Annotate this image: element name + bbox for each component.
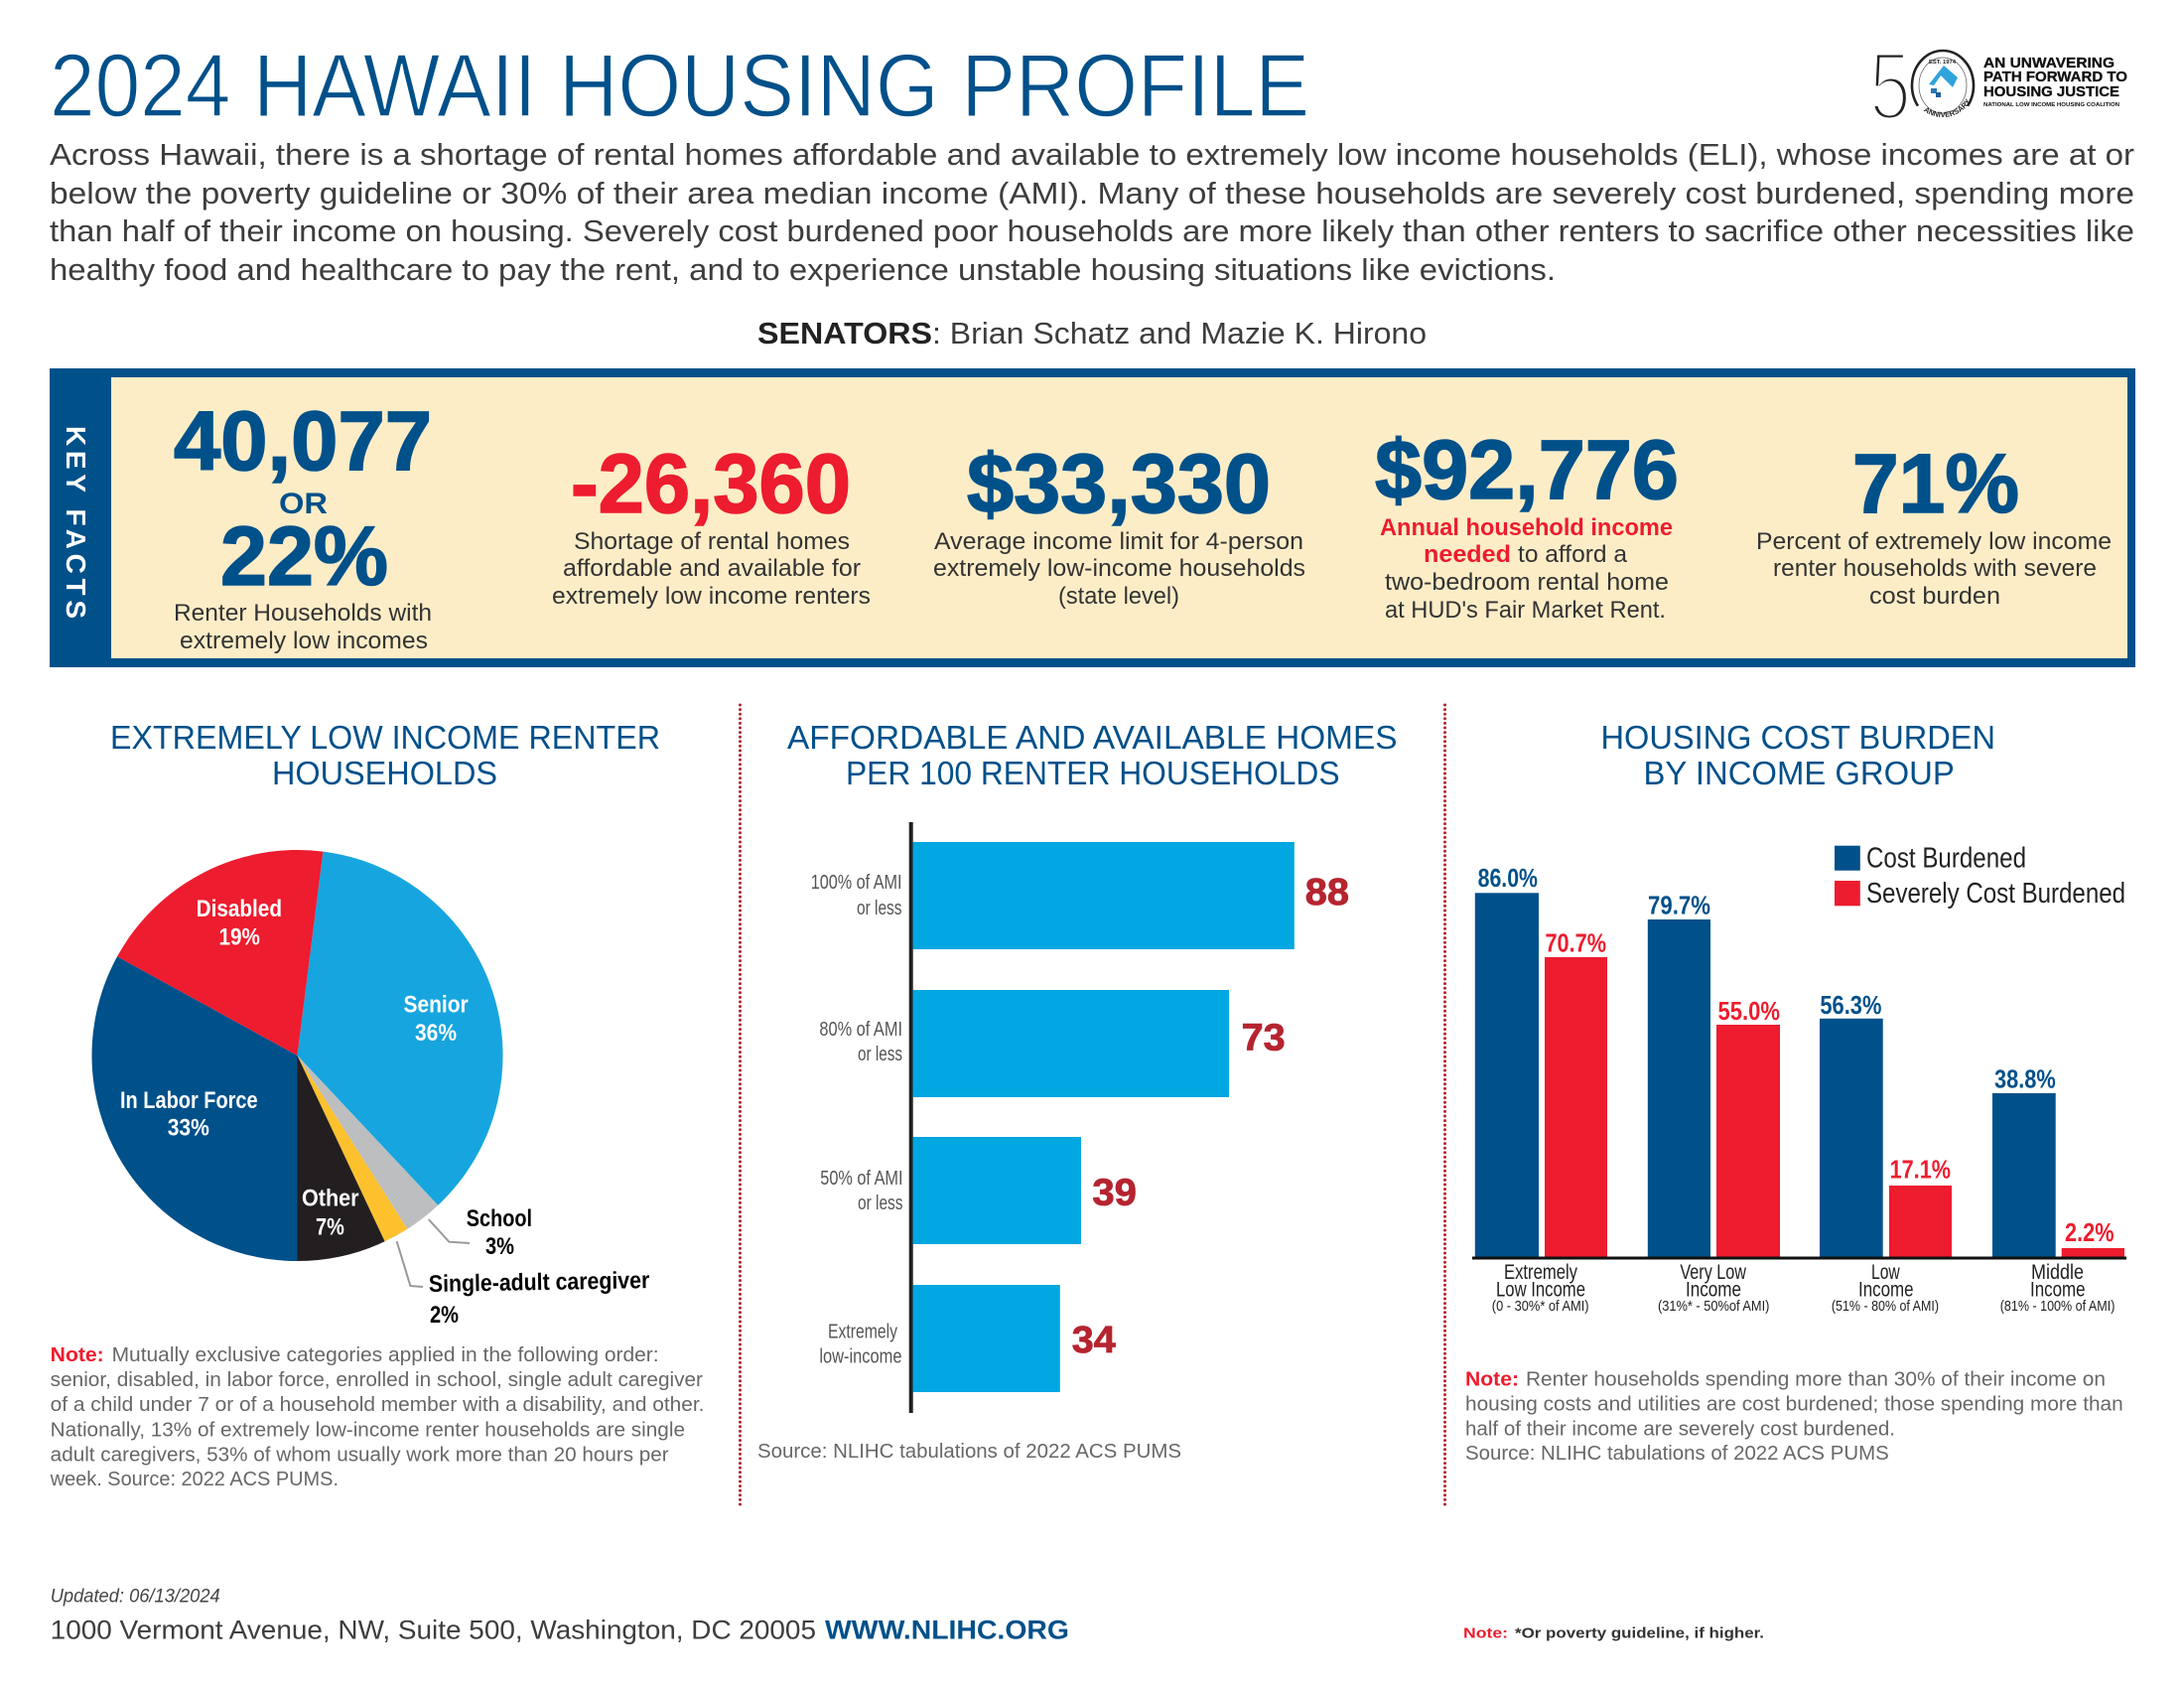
heading: grouped bar chart: HOUSING COST BURDEN xyxy=(1600,719,1995,756)
bar chart: or less xyxy=(858,1193,903,1214)
legend: Severely Cost Burdened xyxy=(1866,878,2125,910)
pie chart: Other xyxy=(302,1186,359,1212)
heading: grouped bar chart: BY INCOME GROUP xyxy=(1644,755,1955,791)
fact: annual household income needed: two-bedroom rental home xyxy=(1385,569,1669,596)
fact: renter households with extremely low incomes: 40,077 xyxy=(174,394,432,488)
intro paragraph: Across Hawaii, there is a shortage of rental homes affordable and available to extremely low income households (ELI), whose incomes are at or xyxy=(50,137,2134,172)
bar chart: low-income xyxy=(819,1346,901,1368)
fact: renter households with extremely low incomes: OR xyxy=(279,488,328,520)
panel: key facts xyxy=(50,368,2135,667)
senators: SENATORS xyxy=(757,316,932,351)
grouped bar chart: 70.7% xyxy=(1545,927,1606,957)
fact: renter households with extremely low incomes: 22% xyxy=(220,509,388,603)
fact: shortage of rental homes: Shortage of rental homes xyxy=(574,528,850,555)
pie chart: Senior xyxy=(403,992,469,1019)
logo: 50th anniversary: 5 xyxy=(1869,32,1911,140)
panel: affordable and available homes xyxy=(757,719,1398,1463)
note: pie chart xyxy=(50,1344,705,1490)
grouped bar chart xyxy=(1472,863,2126,1315)
grouped bar chart: (51% - 80% of AMI) xyxy=(1832,1298,1939,1315)
bar chart: Extremely xyxy=(828,1321,897,1342)
intro paragraph: than half of their income on housing. Severely cost burdened poor households are more likely than other renters to sacrifice other necessities like xyxy=(50,213,2134,248)
logo: 50th anniversary: NATIONAL LOW INCOME HOUSING COALITION xyxy=(1983,102,2119,108)
grouped bar chart: (81% - 100% of AMI) xyxy=(2000,1298,2115,1315)
logo: 50th anniversary: EST. 1974 xyxy=(1929,60,1957,66)
heading: bar chart: AFFORDABLE AND AVAILABLE HOMES xyxy=(787,719,1398,756)
heading: pie chart: HOUSEHOLDS xyxy=(272,755,497,791)
grouped bar chart: (31%* - 50%of AMI) xyxy=(1658,1298,1769,1315)
fact: annual household income needed xyxy=(1375,423,1679,624)
fact: average income limit: (state level) xyxy=(1058,583,1179,610)
pie chart: In Labor Force xyxy=(120,1087,258,1114)
legend xyxy=(1835,843,2125,910)
fact: average income limit: Average income limit for 4-person xyxy=(934,528,1303,555)
fact: renter households with extremely low incomes: extremely low incomes xyxy=(180,628,428,654)
bar chart: 100% of AMI xyxy=(811,872,901,894)
fact: percent with severe cost burden: renter households with severe xyxy=(1773,555,2097,582)
fact: shortage of rental homes: -26,360 xyxy=(571,437,851,530)
note: pie chart: week. Source: 2022 ACS PUMS. xyxy=(50,1469,339,1490)
heading: bar chart xyxy=(787,719,1398,791)
fact: renter households with extremely low incomes xyxy=(174,394,432,654)
fact: annual household income needed: at HUD's Fair Market Rent. xyxy=(1385,597,1666,624)
grouped bar chart: 56.3% xyxy=(1820,990,1881,1020)
fact: annual household income needed: to afford a xyxy=(1518,541,1628,568)
fact: percent with severe cost burden: 71% xyxy=(1852,437,2019,530)
grouped bar chart: (0 - 30%* of AMI) xyxy=(1492,1298,1589,1315)
bar chart: 88 xyxy=(1305,872,1349,914)
grouped bar chart: Low xyxy=(1871,1261,1900,1284)
fact: average income limit: $33,330 xyxy=(967,437,1271,530)
pie chart: School xyxy=(467,1205,532,1232)
fact: renter households with extremely low incomes: Renter Households with xyxy=(174,600,432,627)
logo: 50th anniversary: HOUSING JUSTICE xyxy=(1983,84,2119,100)
fact: shortage of rental homes xyxy=(552,437,871,610)
fact: annual household income needed: needed xyxy=(1424,541,1511,568)
note: cost burden: housing costs and utilities are cost burdened; those spending more than xyxy=(1465,1394,2123,1416)
note: cost burden: Renter households spending more than 30% of their income on xyxy=(1526,1369,2106,1391)
pie chart: 7% xyxy=(316,1213,344,1240)
fact: average income limit: extremely low-income households xyxy=(933,555,1305,582)
grouped bar chart: 79.7% xyxy=(1648,890,1710,919)
fact: annual household income needed: Annual household income xyxy=(1380,514,1673,541)
grouped bar chart: Income xyxy=(2030,1279,2086,1302)
pie chart: Disabled xyxy=(197,896,282,922)
logo: 50th anniversary xyxy=(1869,32,2127,140)
legend: Cost Burdened xyxy=(1866,843,2026,875)
note: cost burden: Source: NLIHC tabulations of 2022 ACS PUMS xyxy=(1465,1443,1889,1465)
grouped bar chart: Income xyxy=(1686,1279,1741,1302)
logo: 50th anniversary: AN UNWAVERING xyxy=(1983,56,2115,71)
grouped bar chart: Extremely xyxy=(1504,1261,1577,1284)
fact: percent with severe cost burden: cost burden xyxy=(1869,583,2000,610)
note: pie chart: Mutually exclusive categories applied in the following order: xyxy=(112,1344,659,1366)
pie chart: 33% xyxy=(168,1115,209,1142)
bar chart: 39 xyxy=(1092,1173,1137,1214)
fact: annual household income needed: $92,776 xyxy=(1375,423,1679,516)
fact: percent with severe cost burden: Percent of extremely low income xyxy=(1756,528,2112,555)
pie chart: 3% xyxy=(485,1233,514,1260)
heading: grouped bar chart xyxy=(1600,719,1995,791)
note: cost burden xyxy=(1465,1369,2123,1465)
panel: extremely low income renter households xyxy=(50,719,705,1490)
heading: pie chart: EXTREMELY LOW INCOME RENTER xyxy=(110,719,660,756)
intro paragraph: healthy food and healthcare to pay the rent, and to experience unstable housing situations like evictions. xyxy=(50,252,1556,287)
grouped bar chart: 86.0% xyxy=(1478,863,1538,893)
grouped bar chart: Very Low xyxy=(1680,1261,1747,1284)
bar chart: 34 xyxy=(1072,1320,1116,1361)
note: pie chart: of a child under 7 or of a household member with a disability, and other. xyxy=(51,1394,705,1416)
grouped bar chart: 17.1% xyxy=(1890,1154,1951,1184)
senators: : Brian Schatz and Mazie K. Hirono xyxy=(932,316,1427,351)
source: bar chart: Source: NLIHC tabulations of 2022 ACS PUMS xyxy=(757,1441,1181,1463)
fact: average income limit xyxy=(933,437,1305,610)
footer: address and website: 1000 Vermont Avenue, NW, Suite 500, Washington, DC 20005 xyxy=(51,1615,816,1644)
fact: shortage of rental homes: affordable and available for xyxy=(563,555,861,582)
bar chart: 73 xyxy=(1242,1018,1286,1059)
bar chart: 80% of AMI xyxy=(819,1019,902,1041)
pie chart: 2% xyxy=(430,1302,459,1329)
grouped bar chart: 38.8% xyxy=(1994,1064,2056,1094)
bar chart: or less xyxy=(858,1044,902,1065)
panel: housing cost burden xyxy=(1465,719,2126,1465)
footer: poverty guideline note: *Or poverty guideline, if higher. xyxy=(1515,1624,1764,1642)
note: pie chart: adult caregivers, 53% of whom usually work more than 20 hours per xyxy=(51,1444,669,1466)
fact: percent with severe cost burden xyxy=(1756,437,2112,610)
footer: updated date: Updated: 06/13/2024 xyxy=(51,1587,220,1607)
footer: poverty guideline note: Note: xyxy=(1463,1624,1508,1642)
logo: 50th anniversary: PATH FORWARD TO xyxy=(1983,70,2127,85)
pie chart: 36% xyxy=(415,1020,457,1047)
note: pie chart: Note: xyxy=(51,1344,104,1366)
heading: pie chart xyxy=(110,719,660,791)
note: cost burden: Note: xyxy=(1465,1369,1519,1391)
fact: shortage of rental homes: extremely low income renters xyxy=(552,583,871,610)
footer: address and website: WWW.NLIHC.ORG xyxy=(825,1615,1069,1644)
heading: bar chart: PER 100 RENTER HOUSEHOLDS xyxy=(846,755,1340,791)
bar chart xyxy=(811,822,1349,1413)
bar chart: or less xyxy=(857,898,901,919)
grouped bar chart: Income xyxy=(1858,1279,1914,1302)
pie chart: Single-adult caregiver xyxy=(429,1267,649,1298)
intro paragraph: below the poverty guideline or 30% of their area median income (AMI). Many of these households are severely cost burdened, spending more xyxy=(50,176,2134,211)
note: cost burden: half of their income are severely cost burdened. xyxy=(1465,1418,1895,1440)
grouped bar chart: 2.2% xyxy=(2065,1217,2115,1247)
grouped bar chart: Middle xyxy=(2031,1261,2084,1284)
key facts side label: KEY FACTS xyxy=(61,426,91,619)
intro paragraph xyxy=(50,137,2134,287)
note: pie chart: senior, disabled, in labor force, enrolled in school, single adult caregiver xyxy=(51,1369,703,1391)
grouped bar chart: 55.0% xyxy=(1717,996,1780,1026)
pie chart: 19% xyxy=(218,924,260,951)
grouped bar chart: Low Income xyxy=(1496,1279,1585,1302)
bar chart: 50% of AMI xyxy=(820,1168,903,1190)
logo: 50th anniversary: ANNIVERSARY xyxy=(1924,98,1969,117)
pie chart xyxy=(92,850,649,1329)
title: 2024 HAWAII HOUSING PROFILE xyxy=(50,37,1309,136)
note: pie chart: Nationally, 13% of extremely low-income renter households are single xyxy=(51,1419,685,1441)
